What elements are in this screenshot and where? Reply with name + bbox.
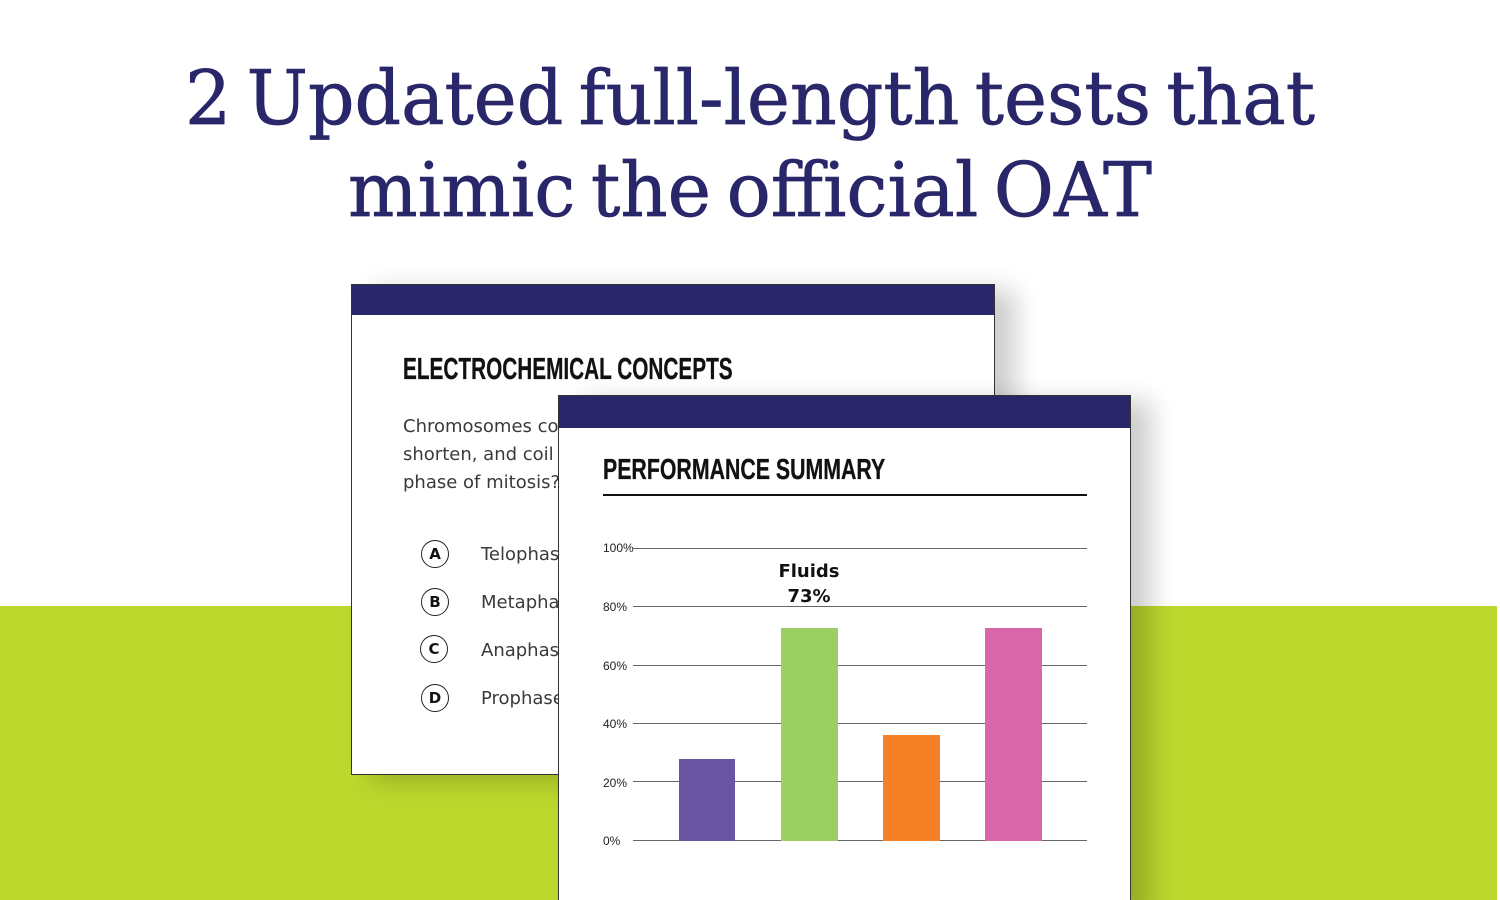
panel: performance summary card bbox=[558, 395, 1131, 900]
bar chart: 73% bbox=[787, 586, 831, 607]
bar chart: 40% bbox=[603, 717, 627, 731]
title: 2 Updated full-length tests that bbox=[185, 54, 1315, 142]
question text: phase of mitosis? bbox=[403, 472, 559, 493]
answer options: D bbox=[429, 689, 441, 707]
card header bar bbox=[559, 396, 1130, 428]
card heading: PERFORMANCE SUMMARY bbox=[603, 454, 885, 486]
bar chart: Fluids bbox=[778, 561, 840, 582]
answer options: C bbox=[428, 640, 440, 658]
bar chart: 60% bbox=[603, 659, 627, 673]
green background band bbox=[0, 606, 1497, 900]
card header bar bbox=[352, 285, 994, 315]
card heading: ELECTROCHEMICAL CONCEPTS bbox=[403, 351, 733, 386]
answer options: B bbox=[429, 593, 441, 611]
title: mimic the official OAT bbox=[348, 146, 1152, 234]
question text bbox=[403, 416, 559, 493]
answer options bbox=[420, 540, 558, 712]
answer options: A bbox=[429, 545, 441, 563]
bar chart bbox=[603, 541, 1087, 848]
bar chart: 20% bbox=[603, 776, 627, 790]
bar chart: 0% bbox=[603, 834, 621, 848]
title bbox=[185, 54, 1315, 234]
bar chart: 80% bbox=[603, 600, 627, 614]
panel: question card bbox=[351, 284, 995, 775]
heading rule bbox=[603, 494, 1087, 496]
bar chart: 100% bbox=[603, 541, 634, 555]
